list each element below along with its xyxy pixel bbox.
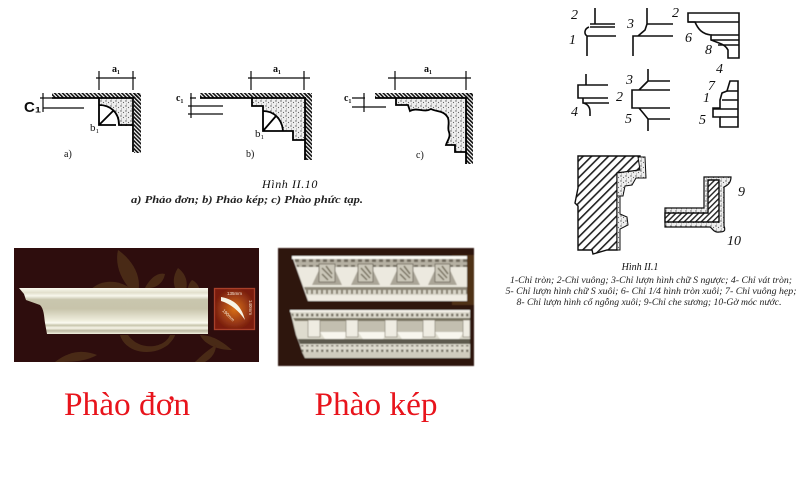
diagram b: double cornice: b) — [246, 149, 254, 160]
diagram c: complex cornice: c) — [416, 150, 424, 161]
diagram a: simple cornice: C₁ — [24, 99, 41, 116]
icon: profile dimensions: 190mm — [221, 308, 236, 322]
section: wall and cornice — [575, 156, 646, 254]
diagram c: complex cornice: a₁ — [424, 64, 432, 75]
profile: round chamfer: 4 — [571, 105, 578, 120]
profile: reverse S: 3 — [626, 17, 634, 32]
diagram a: simple cornice — [24, 64, 141, 160]
profile: stacked band: 5 — [699, 113, 706, 128]
caption: figure II.1 legend: 5- Chỉ lượn hình chữ S xuôi; 6- Chỉ 1/4 hình tròn xuôi; 7- Chỉ vuông hẹp; — [506, 287, 796, 297]
caption: figure II.1 legend: 1-Chỉ tròn; 2-Chỉ vuông; 3-Chỉ lượn hình chữ S ngược; 4- Chỉ vát tròn; — [510, 276, 792, 286]
profile: band with S mouldings: 5 — [625, 112, 632, 127]
profile: round and square bead — [569, 8, 616, 56]
trapezoid panels and heads — [308, 320, 470, 339]
caption: figure II.1 legend: 8- Chỉ lượn hình cổ ngỗng xuôi; 9-Chỉ che sương; 10-Gờ móc nước. — [516, 297, 782, 308]
caption: figure II.1 title: Hình II.1 — [621, 262, 658, 273]
photo: double ornate crown moulding — [278, 248, 474, 366]
diagram a: simple cornice: a) — [64, 149, 72, 160]
diagram a: simple cornice: a₁ — [112, 64, 120, 75]
icon: profile dimensions: 140mm — [248, 300, 253, 315]
diagram c: complex cornice — [344, 64, 473, 164]
profile: reverse S — [626, 8, 673, 56]
diagram b: double cornice: a₁ — [273, 64, 281, 75]
moulding: upper — [292, 256, 467, 301]
profile: stacked band — [699, 79, 738, 128]
panel: cornice diagrams figure II.10 — [24, 64, 473, 206]
profile: band with S mouldings — [616, 69, 670, 131]
label: Phào kép: Phào kép — [314, 387, 438, 423]
diagram b: double cornice: c₁ — [176, 93, 183, 104]
section: drip ledge: 9 — [738, 185, 745, 200]
icon: profile dimensions: 135mm — [227, 291, 242, 296]
profile: round and square bead: 1 — [569, 33, 576, 48]
section: drip ledge: 10 — [727, 234, 741, 249]
profile: band with S mouldings: 2 — [616, 90, 623, 105]
caption: figure II.10 title: Hình II.10 — [261, 177, 318, 191]
profile: cornice block: 6 — [685, 31, 692, 46]
photo: simple crown moulding — [14, 248, 259, 362]
profile: cornice block: 8 — [705, 43, 712, 58]
panel: moulding profile diagrams figure II.1 — [506, 6, 796, 308]
profile: cornice block — [672, 6, 739, 77]
profile: cornice block: 2 — [672, 6, 679, 21]
moulding: lower — [290, 310, 470, 358]
diagram c: complex cornice: c₁ — [344, 93, 351, 104]
diagram a: simple cornice: b₁ — [90, 122, 100, 134]
profile: stacked band: 7 — [708, 79, 716, 94]
profile: round chamfer — [571, 74, 609, 120]
caption: figure II.1 legend — [506, 276, 796, 308]
diagram b: double cornice — [176, 64, 312, 160]
profile: stacked band: 1 — [703, 91, 710, 106]
profile: round and square bead: 2 — [571, 8, 578, 23]
icon: profile dimensions — [214, 288, 254, 330]
caption: figure II.10 legend: a) Phảo đơn; b) Phảo kép; c) Phào phức tạp. — [131, 194, 363, 206]
ornament blocks — [312, 264, 457, 285]
profile: cornice block: 4 — [716, 62, 723, 77]
section: drip ledge — [665, 177, 745, 249]
profile: band with S mouldings: 3 — [625, 73, 633, 88]
label: Phào đơn: Phào đơn — [64, 387, 190, 423]
diagram b: double cornice: b₁ — [255, 128, 264, 140]
